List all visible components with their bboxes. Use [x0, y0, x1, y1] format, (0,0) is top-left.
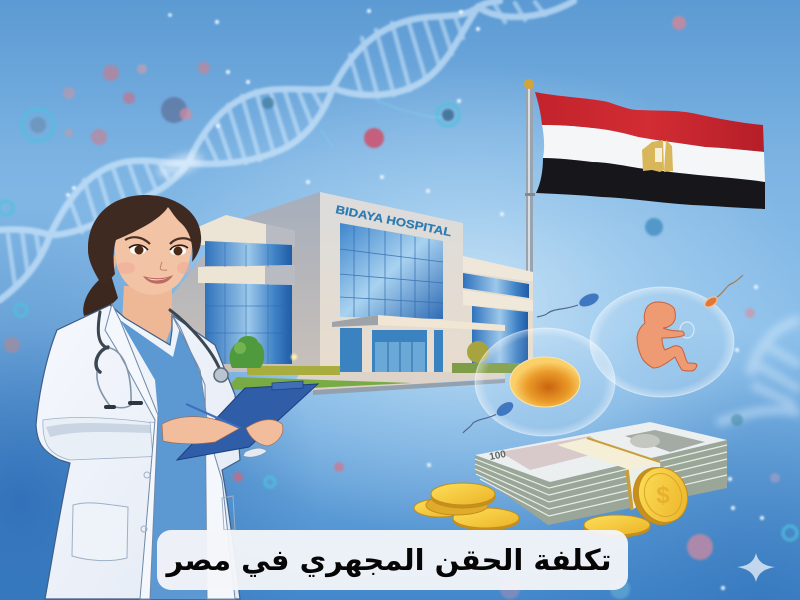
DNA helix: main strand across the top [0, 1, 574, 300]
stethoscope [96, 310, 228, 408]
right wing [463, 256, 533, 372]
hair [88, 195, 201, 283]
bubble with fetus [590, 287, 734, 397]
stack of banknotes: 100 [488, 449, 507, 463]
hospital building [172, 192, 533, 395]
coat pockets and buttons [72, 472, 235, 561]
entrance canopy [332, 315, 505, 372]
central tower [320, 192, 463, 372]
stack of banknotes [475, 422, 727, 525]
doctor illustration [36, 195, 318, 599]
bubble with egg cell [475, 328, 615, 436]
coat lapels [105, 304, 235, 599]
hospital sign: BIDAYA HOSPITAL [334, 204, 452, 239]
flag bands [535, 92, 765, 209]
clipboard [177, 381, 318, 460]
scrubs [120, 320, 208, 599]
gold coins: $ [656, 482, 670, 509]
title banner [157, 530, 628, 590]
main glass facade [340, 223, 443, 319]
Egyptian flag on flagpole [524, 79, 765, 388]
lab coat body [36, 305, 240, 599]
flagpole [524, 79, 535, 388]
sparkle icon [737, 553, 775, 582]
grounds: hedge, lawn and path [225, 336, 520, 395]
neck and chest [122, 286, 172, 342]
glow at the helix crossing [154, 148, 206, 182]
title banner: تكلفة الحقن المجهري في مصر [165, 543, 611, 577]
ponytail [83, 272, 118, 316]
left wing [198, 215, 295, 364]
DNA helix: right side strand [717, 320, 800, 423]
face [104, 205, 192, 295]
hands and pen [162, 404, 283, 457]
left wall [172, 192, 320, 372]
sperm cells [463, 275, 743, 433]
gold coins [414, 460, 696, 537]
